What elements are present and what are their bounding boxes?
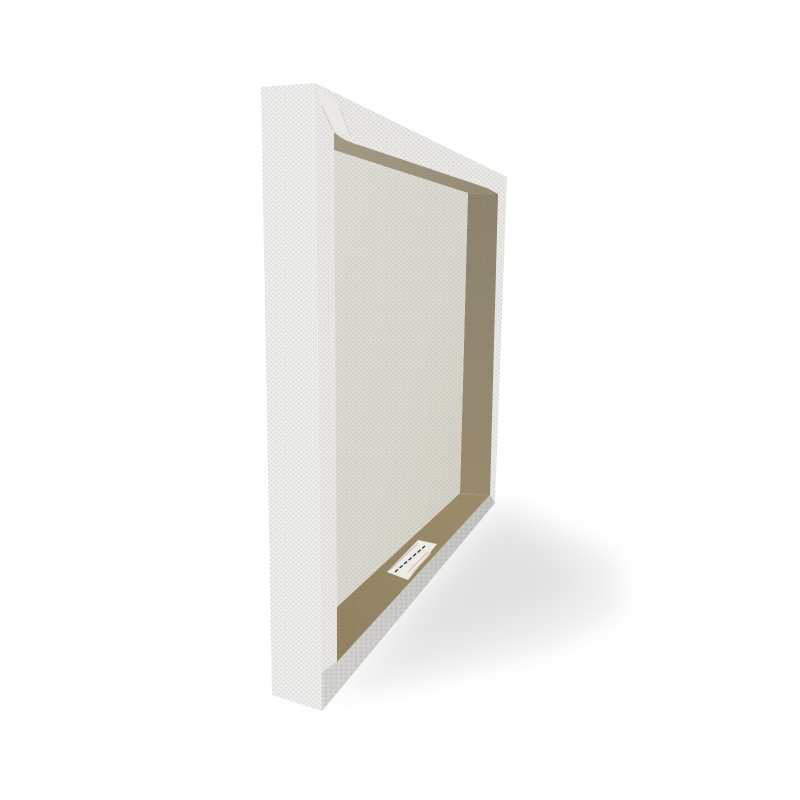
bottom rail of frame xyxy=(322,495,495,711)
product label xyxy=(387,540,437,580)
cast shadow xyxy=(330,505,622,700)
bottom band xyxy=(337,493,490,662)
right strip xyxy=(460,193,498,495)
canvas corner fold xyxy=(316,85,351,138)
top band xyxy=(334,132,498,194)
canvas back panel xyxy=(334,150,468,607)
frame: back face with fold xyxy=(315,83,507,711)
frame: front edge xyxy=(261,83,322,711)
tan cardboard opening xyxy=(334,132,498,662)
